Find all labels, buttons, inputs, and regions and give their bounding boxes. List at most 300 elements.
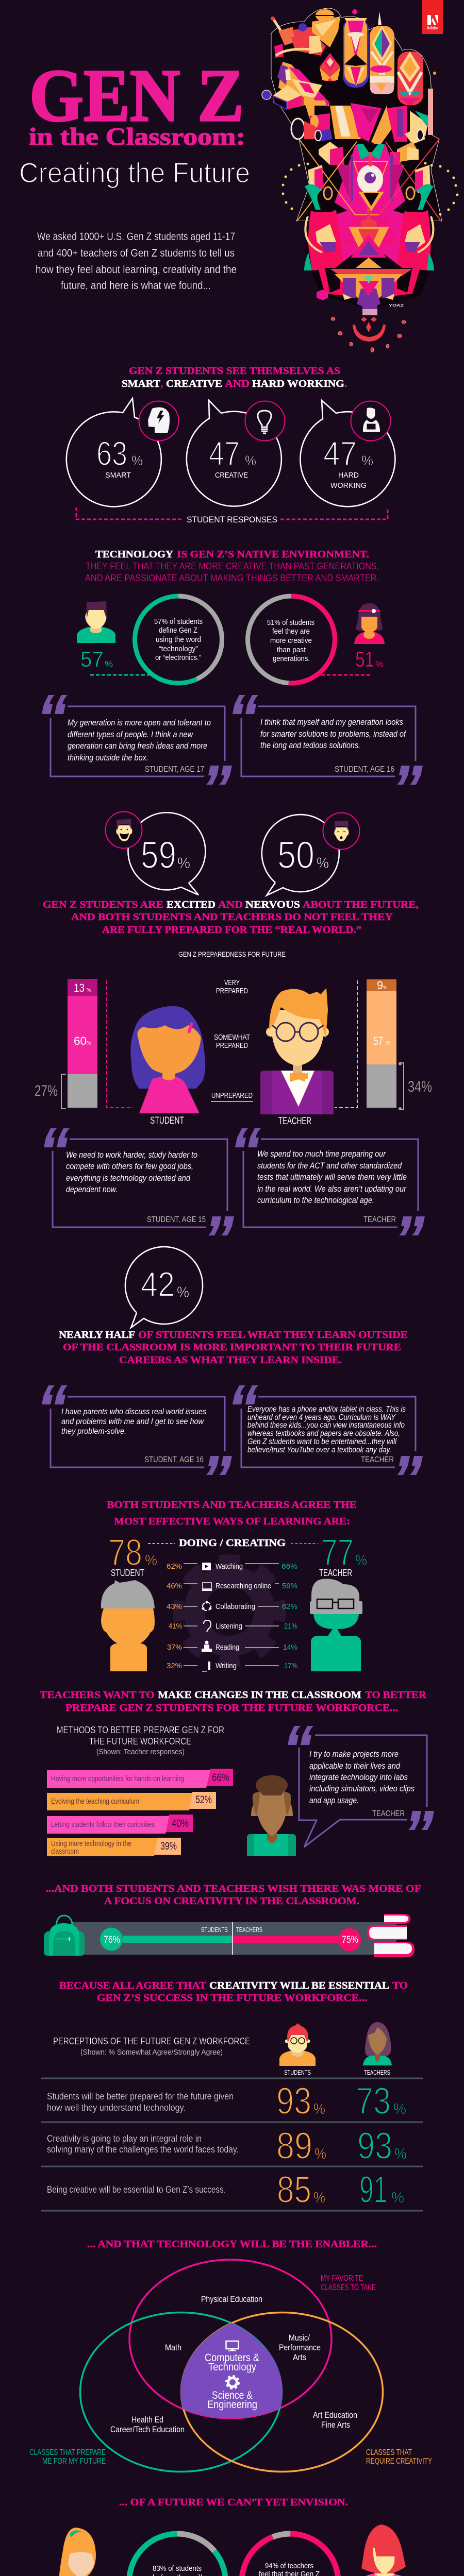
heading: teachers want to make changes: PREPARE GEN Z STUDENTS FOR THE FUTURE WORKFORCE... [65,1702,398,1714]
quote: student age 16 real world: and problems with me and I get to see how [61,1417,204,1426]
ring chart: 94% [228,2520,352,2576]
heading: technology native environment: IS GEN Z’S NATIVE ENVIRONMENT. [177,549,369,560]
bubble: smart 63%: % [131,453,143,468]
quote: student age 17: generation can bring fresh ideas and more [68,741,207,751]
row: watching: 66% [281,1562,297,1571]
heading: nearly half: CAREERS AS WHAT THEY LEARN INSIDE. [119,1354,342,1366]
heading: focus on creativity [46,1883,421,1907]
row: writing [167,1662,297,1671]
row: collaborating: 62% [282,1602,297,1611]
illustration: student silhouette [101,1580,155,1671]
stat: doing creating [108,1532,367,1578]
label: teacher: TEACHER [278,1116,311,1127]
icon: person at laptop [363,408,380,432]
bubble: nearly half 42% [125,1247,203,1328]
crossed triangle lines [297,139,440,221]
venn label: require creativity [366,2448,432,2466]
heading: creativity essential: CREATIVITY WILL BE ESSENTIAL [209,1980,389,1991]
bubble: creative 47%: % [245,453,256,468]
quote: teacher on standardized tests: tests that ultimately will serve them very little [257,1172,407,1182]
ring chart: 83% [129,2534,226,2576]
quote: student age 15: everything is technology oriented and [66,1173,190,1183]
pot tops [309,206,429,221]
heading: creativity essential: BECAUSE ALL AGREE THAT [59,1980,207,1991]
quote: teacher on standardized tests: We spend too much time preparing our [257,1149,386,1159]
heading: effective ways of learning: BOTH STUDENTS AND TEACHERS AGREE THE [107,1499,357,1511]
quote: teacher on phones: believe/trust YouTube over a textbook any day. [247,1446,391,1454]
perceptions table [41,2077,423,2211]
ring text: 51% [267,618,314,663]
table: learning methods [167,1562,297,1671]
row: integral role: 89 [276,2125,312,2167]
row: essential: Being creative will be essential to Gen Z’s success. [47,2184,226,2195]
teacher stacked bar: 9 [377,979,383,992]
row: researching online [167,1582,297,1591]
heading: technology native environment: AND ARE PASSIONATE ABOUT MAKING THINGS BETTER AND SMARTER. [85,573,379,583]
chart title: methods: METHODS TO BETTER PREPARE GEN Z FOR [57,1725,224,1735]
ring text: 94% [252,2562,327,2576]
row: reading: Reading [216,1643,239,1652]
heading: technology native environment: TECHNOLOGY [95,549,174,560]
quote: teacher with speech tail: integrate technology into labs [309,1772,408,1782]
bracket: student responses [76,507,388,524]
quote: student age 15 [44,1128,234,1235]
chart title: methods: THE FUTURE WORKFORCE [89,1736,191,1747]
teacher stacked bar [367,979,432,1110]
row: better prepared: how well they understand technology. [47,2103,186,2113]
venn centre: computers: Computers & [205,2352,259,2364]
venn items: Music/ [289,2333,310,2343]
preparedness scale labels: SOMEWHAT [214,1033,250,1042]
bar: curriculum 52% [47,1792,216,1810]
ring text: 51%: more creative [270,636,312,645]
venn items: Performance [279,2343,321,2352]
heading: nearly half: OF THE CLASSROOM IS MORE IMPORTANT TO THEIR FUTURE [63,1342,401,1353]
row: writing: 17% [284,1662,297,1670]
bubble: excited 59%: % [177,855,190,872]
quote: teacher with speech tail: TEACHER [372,1809,405,1818]
row: essential: % [313,2190,325,2206]
quote: student age 16 real world [42,1385,232,1475]
ring text: 51%: feel they are [272,627,310,636]
stat: doing creating: % [145,1552,157,1569]
heading: technology native environment [85,549,379,583]
heading: excited and nervous [43,899,419,936]
row: collaborating: 43% [167,1602,182,1611]
quote: teacher with speech tail: applicable to their lives and [309,1761,400,1771]
column headers: TEACHERS [364,2069,390,2076]
icon: stack of books [367,1914,415,1957]
label: student: STUDENT [150,1115,184,1126]
table title: perceptions [53,2036,250,2057]
heading: smart creative hard working: , [161,378,163,389]
icon: girl [354,603,385,644]
bubble: hard working 47%: WORKING [330,481,367,490]
quote: teacher on phones [233,1385,423,1475]
quote: teacher with speech tail [288,1726,434,1847]
bar: curiosities 40% [47,1815,193,1834]
heading: teachers want to make changes: TO BETTER [365,1689,427,1701]
bubble: excited 59% [105,812,205,895]
icon: backpack [44,1916,85,1956]
venn label: favorite classes [321,2274,376,2292]
venn items: Math [165,2343,181,2352]
bar: more technology 39%: 39% [160,1840,177,1852]
row: better prepared: 93 [276,2080,311,2122]
palm [291,72,436,147]
row: watching [167,1562,297,1571]
teacher stacked bar: 34% [408,1078,432,1095]
venn label: prepare for future: CLASSES THAT PREPARE [29,2448,106,2457]
venn items: Art Education [313,2410,357,2420]
bar: more technology 39%: Using more technology in the [51,1839,131,1848]
student stacked bar: 27% [35,1082,58,1099]
heading: excited and nervous: GEN Z STUDENTS ARE [43,899,163,910]
quote: student age 16 real world: STUDENT, AGE 16 [144,1455,204,1464]
quote: teacher with speech tail: including simulators, video clips [309,1784,415,1793]
row: integral role: % [394,2146,407,2162]
teacher stacked bar: % [386,1041,390,1046]
chart title: methods [57,1725,224,1756]
quote: student age 17: different types of people. I think a new [68,730,193,739]
creativity comparison bar: STUDENTS [201,1926,228,1934]
bar: curriculum 52%: Evolving the teaching curriculum [51,1797,139,1806]
row: listening [169,1620,297,1632]
bubble: hard working 47% [300,400,395,506]
venn centre: computers [205,2352,259,2373]
heading: nearly half [59,1329,408,1366]
ring text: 57%: 57% of students [154,617,203,626]
bar: more technology 39% [47,1838,181,1856]
illustration: teacher brown hair [247,1775,296,1856]
bubble: nervous 50% [262,813,360,895]
row: reading [167,1640,297,1652]
wrist blocks [262,62,330,118]
heading: smart creative hard working: AND [225,378,250,389]
bubble: hard working 47%: HARD [338,471,359,480]
venn items: Career/Tech Education [110,2425,185,2434]
column headers: STUDENTS [284,2069,311,2076]
icon: happy face [116,819,132,841]
icon: teacher with long hair [363,2022,392,2065]
ring text: 94%: 94% of teachers [265,2562,313,2570]
Illustration: geometric fist, lower part [296,208,442,352]
dashed connector student [107,980,133,1108]
ring text: 57% [154,617,203,662]
preparedness scale labels [211,978,253,1102]
heading: creativity essential [59,1980,408,2004]
bubble: creative 47%: CREATIVE [215,471,248,480]
quote: teacher on standardized tests [235,1128,425,1235]
quote: teacher on phones: TEACHER [361,1455,394,1464]
stat: 51%: % [375,660,384,669]
venn label: prepare for future [29,2448,106,2466]
heading: teachers want to make changes [40,1689,427,1714]
lower arrow body [317,268,420,342]
heading: excited and nervous: EXCITED [167,899,216,910]
creativity comparison bar: TEACHERS [236,1926,262,1934]
dashed connector pink [321,674,372,676]
student stacked bar: 13 [74,981,85,994]
bar: curiosities 40%: 40% [172,1818,189,1829]
venn centre: computers: Technology [208,2361,256,2373]
quote: student age 15: STUDENT, AGE 15 [147,1215,206,1224]
quote: student age 15: dependent now. [66,1184,118,1194]
stat: doing creating: 77 [321,1532,354,1573]
stat: 57%: % [105,660,113,669]
bar: hands-on learning 66%: 66% [212,1772,229,1784]
venn items: Health Ed [131,2415,163,2425]
quote: student age 17: thinking outside the box. [68,753,148,762]
quote: teacher on standardized tests: TEACHER [363,1215,396,1224]
stat: doing creating: TEACHER [319,1568,352,1578]
icon: monitor [226,2341,238,2351]
venn items [110,2294,357,2434]
intro paragraph: and 400+ teachers of Gen Z students to tell us [38,247,235,259]
header title block [19,55,250,189]
icon: nervous face [334,821,349,841]
quote: student age 16: the long and tedious solutions. [260,740,360,750]
student stacked bar [35,979,97,1109]
row: researching online: 59% [282,1582,297,1590]
pots and base [304,208,434,273]
row: essential: % [391,2190,404,2206]
bar: curriculum 52%: 52% [195,1794,212,1806]
table title: perceptions: (Shown: % Somewhat Agree/Strongly Agree) [80,2048,223,2057]
bubble: hard working 47%: 47 [323,434,357,472]
quote: student age 16: I think that myself and my generation looks [260,717,403,727]
quote: teacher on phones: whereas textbooks and papers are obsolete. Also, [247,1429,400,1438]
student stacked bar: % [87,1041,91,1046]
bubble: nearly half 42%: % [177,1284,189,1301]
side pieces and spouts [305,165,434,210]
preparedness scale labels: VERY [224,978,240,987]
bar: curiosities 40%: Letting students follow their curiosities [51,1820,155,1829]
heading: focus on creativity: ...AND BOTH STUDENTS AND TEACHERS WISH THERE WAS MORE OF [46,1883,421,1894]
quote: student age 16 real world: I have parents who discuss real world issues [61,1408,206,1416]
bubble: nervous 50%: % [317,855,329,872]
quote: teacher with speech tail: I try to make projects more [309,1749,399,1759]
quote: teacher on standardized tests: in the real world. We also aren’t updating our [257,1184,407,1194]
venn items: Fine Arts [321,2420,350,2430]
bubble: smart 63% [67,398,178,506]
quote: teacher on phones: behind these kids...you can view instantaneous info [247,1421,405,1430]
bar: hands-on learning 66%: Having more opportunities for hands-on learning [51,1774,184,1783]
table title: perceptions: PERCEPTIONS OF THE FUTURE GEN Z WORKFORCE [53,2036,250,2046]
row: essential: 91 [359,2169,388,2211]
teacher stacked bar: % [383,985,387,991]
bubble: creative 47%: 47 [209,434,240,472]
subtitle: creating the future: Creating the Future [19,157,250,189]
decorative gear backdrop [169,1551,290,1671]
icon: head with lightning bolt [148,408,170,433]
preparedness scale labels: PREPARED [216,1041,248,1050]
heading: nearly half: NEARLY HALF [59,1329,135,1341]
quote: teacher on phones: Everyone has a phone and/or tablet in class. This is [247,1405,406,1414]
quote: student age 16 [233,695,423,785]
venn label: favorite classes: CLASSES TO TAKE [321,2283,376,2292]
quote: teacher on standardized tests: students for the ACT and other standardized [257,1161,402,1171]
ring text: 57%: using the word [156,635,201,644]
venn label: require creativity: CLASSES THAT [366,2448,412,2457]
heading: future we cannot envision: ... OF A FUTURE WE CAN’T YET ENVISION. [119,2497,348,2508]
quote: student age 15: compete with others for few good jobs, [66,1161,193,1171]
bar chart: methods [47,1769,233,1856]
bubble: hard working 47%: % [361,453,373,468]
row: reading: 37% [167,1643,182,1652]
venn centre: science: Engineering [207,2399,257,2411]
row: researching online: Researching online [216,1582,271,1590]
preparedness scale labels: UNPREPARED [211,1091,253,1100]
row: integral role: % [314,2146,326,2162]
quote: student age 16: STUDENT, AGE 16 [335,765,394,774]
ring text: 57%: define Gen Z [159,626,197,635]
heading: excited and nervous: ARE FULLY PREPARED FOR THE “REAL WORLD.” [102,924,361,936]
venn label: require creativity: REQUIRE CREATIVITY [366,2457,432,2466]
heading: excited and nervous: AND [218,899,243,910]
heading: effective ways of learning: MOST EFFECTIVE WAYS OF LEARNING ARE: [114,1516,350,1527]
heading: smart creative hard working: CREATIVE [166,378,222,389]
heading: focus on creativity: A FOCUS ON CREATIVITY IN THE CLASSROOM. [104,1895,359,1907]
ring text: 57%: “technology” [159,645,198,653]
teacher stacked bar: 57 [373,1035,383,1047]
heading: creativity essential: TO [392,1980,408,1991]
row: better prepared: % [313,2101,325,2117]
ring chart: 51% [247,596,335,683]
stat: 57%: 57 [80,647,104,672]
quote: student age 17: My generation is more open and tolerant to [68,718,211,727]
Illustration: geometric fist, upper part [262,8,459,221]
heading: technology the enabler: ... AND THAT TECHNOLOGY WILL BE THE ENABLER... [87,2239,377,2250]
venn centre: science: Science & [212,2389,253,2401]
heading: teachers want to make changes: MAKE CHANGES IN THE CLASSROOM [158,1689,361,1701]
row: essential: 85 [277,2169,311,2211]
ring text: 83% [146,2564,206,2576]
icon: light bulb [258,411,271,433]
row: listening: 41% [169,1622,182,1631]
heading: smart creative hard working [122,365,347,389]
row: watching: Watching [216,1562,243,1571]
illustration: student girl [130,1006,205,1113]
heading: excited and nervous: ABOUT THE FUTURE, [303,899,419,910]
venn label: favorite classes: MY FAVORITE [321,2274,363,2283]
quote: student age 16: for smarter solutions to problems, instead of [260,729,407,739]
student stacked bar: 60 [74,1035,87,1047]
bracket: student responses: STUDENT RESPONSES [187,515,277,524]
venn items: Physical Education [201,2294,262,2304]
icon: gear [226,2376,239,2388]
dashed connector green [90,674,150,676]
venn centre: science [207,2389,257,2411]
illustration: student girl orange hair [59,2528,105,2576]
heading: smart creative hard working: HARD WORKING [252,378,344,389]
heading: excited and nervous: AND BOTH STUDENTS AND TEACHERS DO NOT FEEL THEY [71,911,393,923]
heading: smart creative hard working: SMART [122,378,161,389]
stat: doing creating: DOING / CREATING [179,1537,286,1549]
row: better prepared: 73 [356,2080,391,2122]
quote: student age 16 real world: they problem-solve. [61,1427,126,1436]
yellow dots [281,162,459,215]
Adobe logo tab: Adobe [427,25,438,30]
row: listening: 21% [284,1622,297,1631]
row: better prepared [47,2080,406,2122]
intro paragraph: future, and here is what we found... [61,280,211,292]
row: integral role [47,2125,407,2167]
heading: excited and nervous: NERVOUS [245,899,300,910]
bubble: nervous 50%: 50 [277,834,314,876]
creativity comparison bar: 75% [342,1935,358,1945]
heading: nearly half: OF STUDENTS FEEL WHAT THEY LEARN OUTSIDE [138,1329,408,1341]
row: integral role: Creativity is going to play an integral role in [47,2133,202,2144]
illustration: teacher red hair [361,2524,406,2576]
row: writing: 32% [167,1662,182,1670]
quote: teacher on phones: unheard of even 4 years ago. Curriculum is WAY [247,1413,396,1422]
row: collaborating: Collaborating [216,1602,255,1611]
intro paragraph: how they feel about learning, creativity and the [36,264,237,276]
venn items: Arts [293,2352,306,2362]
quote: student age 17: STUDENT, AGE 17 [145,765,204,774]
bubble: smart 63%: 63 [96,434,127,472]
ring text: 51%: generations. [273,654,310,663]
chart title: preparedness: GEN Z PREPAREDNESS FOR FUTURE [178,951,286,958]
finger shapes [320,18,423,106]
bubble: smart 63%: SMART [105,471,131,480]
quote: teacher with speech tail: and app usage. [309,1795,359,1805]
row: better prepared: % [393,2101,406,2117]
chart title: methods: (Shown: Teacher responses) [96,1748,185,1756]
creativity comparison bar: 76% [104,1935,120,1945]
quote: student age 17 [42,695,232,785]
stat: doing creating: STUDENT [111,1568,144,1578]
row: watching: 62% [167,1562,182,1571]
creativity comparison bar [71,1922,396,1955]
bar: hands-on learning 66% [47,1769,233,1788]
bubble: excited 59%: 59 [141,834,176,876]
ring text: 51%: 51% of students [267,618,314,627]
heading: teachers want to make changes: TEACHERS WANT TO [40,1689,155,1701]
heading: smart creative hard working: . [344,378,347,389]
ring text: 57%: or “electronics.” [155,653,201,662]
column headers [284,2069,390,2076]
row: integral role: solving many of the challenges the world faces today. [47,2144,239,2155]
row: writing: Writing [216,1662,237,1670]
stat: doing creating: 78 [108,1532,142,1573]
quote: teacher on phones: Gen Z students want to be entertained...they will [247,1437,396,1446]
row: better prepared: Students will be better prepared for the future given [47,2091,234,2102]
cube steps [319,142,419,165]
illustration: teacher with glasses [260,988,334,1114]
dashed connector teacher [335,980,357,1108]
stat: doing creating: % [355,1552,367,1569]
centre panel with eye [335,144,405,216]
bar: more technology 39%: classroom [51,1847,79,1856]
bubble: nearly half 42%: 42 [141,1265,175,1304]
heading: technology native environment: THEY FEEL THAT THEY ARE MORE CREATIVE THAN PAST GENERATIONS, [86,561,379,571]
intro paragraph: We asked 1000+ U.S. Gen Z students aged 11-17 [37,231,235,243]
row: researching online: 46% [167,1582,182,1590]
ring chart: 57% [135,596,222,683]
bubble: creative 47% [187,400,285,506]
row: reading: 14% [283,1643,297,1652]
icon: boy [77,601,115,643]
intro paragraph [36,231,237,292]
ring text: 51%: than past [277,646,306,654]
venn label: prepare for future: ME FOR MY FUTURE [42,2457,106,2466]
venn diagram: classes [29,2260,432,2472]
quote: student age 15: We need to work harder, study harder to [66,1150,197,1160]
title: in the classroom: in the Classroom: [29,123,245,150]
title: Gen Z: GEN Z [29,55,244,137]
